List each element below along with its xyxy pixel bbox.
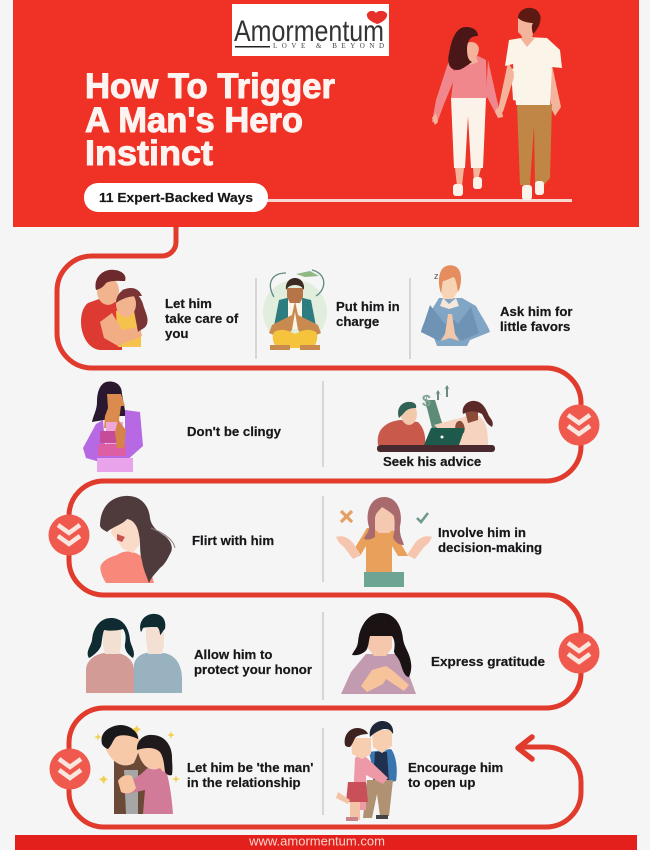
title: A Man's Hero [85,101,303,140]
icon: chevron badge right 2 [558,632,600,674]
label: little favors [500,319,570,334]
label: protect your honor [194,662,312,677]
illustration: woman asking favor: z [434,271,439,281]
panel: red header [13,0,639,227]
label: Allow him to [194,647,272,662]
label: in the relationship [187,775,301,790]
title: Instinct [85,134,213,173]
icon: chevron badge left 1 [48,514,90,556]
label: Put him in [336,299,400,314]
illustration: meditating man [263,270,327,350]
label: Involve him in [438,525,526,540]
icon: chevron badge left 2 [50,748,90,790]
illustration: couple with laptop: $ [422,393,431,410]
logo [232,4,389,56]
label: Encourage him [408,760,503,775]
illustration: woman choosing [336,497,432,587]
illustration: adoring couple [94,725,180,814]
label: you [165,326,188,341]
footer bar: www.amormentum.com [248,834,385,848]
illustration: woman asking favor [421,265,490,346]
illustration: couple portrait [86,614,182,693]
footer bar [15,834,637,850]
label: Ask him for [500,304,573,319]
label: Let him [165,296,212,311]
subtitle pill [84,183,268,212]
logo: Amormentum [234,15,384,48]
illustration: woman with books [83,382,143,472]
label: charge [336,314,379,329]
icon: chevron badge right 1 [558,404,600,446]
label: Express gratitude [431,654,545,669]
label: Let him be 'the man' [187,760,313,775]
path: winding red road [57,227,581,827]
illustration: flirting woman [100,496,175,583]
illustration: hugging couple [336,721,397,821]
title [85,67,335,173]
subtitle pill: 11 Expert-Backed Ways [99,190,253,205]
label: Seek his advice [383,454,481,469]
label: Flirt with him [192,533,274,548]
illustration: embracing couple [81,270,148,350]
label: Don't be clingy [187,424,282,439]
label: to open up [408,775,475,790]
illustration: couple holding hands [432,8,562,200]
arrow head [518,737,532,759]
label: decision-making [438,540,542,555]
illustration: couple with laptop [377,385,495,452]
label: take care of [165,311,239,326]
ground line [266,199,572,202]
logo: LOVE & BEYOND [273,42,384,50]
illustration: grateful woman [341,613,416,694]
title: How To Trigger [85,67,335,106]
